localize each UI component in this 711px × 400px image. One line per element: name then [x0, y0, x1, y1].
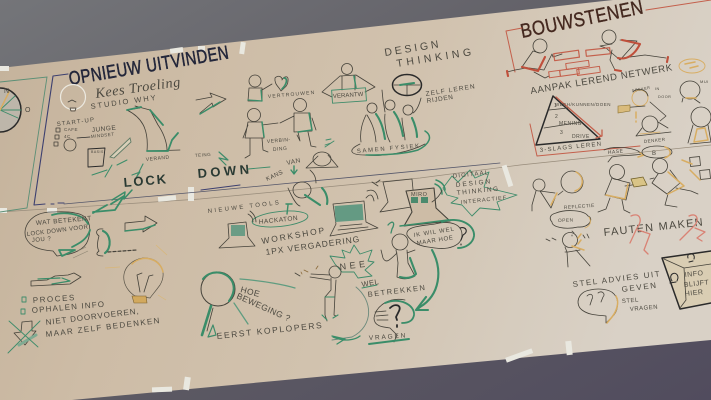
people: right column	[679, 59, 711, 144]
panel: previous section frame	[0, 77, 47, 212]
label: verbinding	[267, 137, 291, 153]
start-up checklist	[54, 127, 78, 151]
connector	[248, 167, 270, 169]
label: kans: KANS	[265, 170, 284, 183]
checklist: proces: OPHALEN INFO	[31, 300, 105, 315]
text: vragen: VRAGEN	[369, 332, 406, 342]
person: eager fist	[301, 266, 318, 274]
label: start-up: START-UP	[57, 117, 95, 128]
text: question	[27, 215, 92, 244]
label: compass N: N	[4, 88, 10, 95]
panel: nieuwe tools	[201, 170, 517, 344]
pyramid: 3-slagsleren: 1	[554, 103, 557, 109]
text: fouten maken: FAUTEN MAKEN	[603, 217, 704, 239]
text: wel betrekken	[361, 277, 426, 299]
icon: light bulb	[60, 84, 86, 111]
heading: design thinking	[384, 39, 473, 70]
people group: samen fysiek: SAMEN FYSIEK	[357, 144, 420, 155]
pyramid: 3-slagsleren: MENING	[559, 121, 582, 127]
label: verandering: VERAND	[146, 155, 170, 163]
icon: back laptop	[372, 179, 424, 212]
text: niet doorvoeren: NIET DOORVOEREN,	[45, 307, 140, 327]
icon: wheel diagram	[0, 88, 21, 132]
arrow: down green	[291, 166, 297, 174]
person: builder left	[507, 39, 562, 78]
label: zelf leren rijden	[425, 83, 476, 105]
person: listening	[546, 232, 590, 267]
label: zelf leren rijden: RIJDEN	[426, 94, 454, 105]
icon: book: BASIS	[91, 150, 104, 154]
text: workshop: 1PX VERGADERING	[265, 234, 360, 257]
icon: miro laptop: MIRO	[411, 192, 428, 198]
heading: design thinking: DESIGN	[384, 39, 440, 59]
arrow: transition	[196, 93, 226, 114]
icon: road turn arrow	[127, 106, 180, 151]
bubbles: vraag: HASE	[608, 148, 624, 156]
text: wel betrekken: WEL	[361, 277, 380, 289]
red bracket and label	[530, 124, 640, 156]
bottom frame line	[64, 163, 500, 204]
checklist: proces: PROCES	[33, 293, 75, 305]
person: head below	[288, 170, 327, 206]
bubble: ik wil wel maar hoe: MAAR HOE	[416, 235, 454, 247]
person: docker: DENKER	[644, 137, 666, 144]
label: reflectie: REFLECTIE	[564, 203, 595, 211]
people: leren: SOEKER	[631, 86, 651, 93]
text: hoe beweging: HOE	[239, 284, 261, 299]
box: info blijft hier	[662, 251, 711, 309]
label: aanpak lerend netwerk: AANPAK LEREND NETWERK	[530, 62, 674, 97]
text: hoe beweging: BEWEGING ?	[235, 291, 292, 323]
small lightning arrow	[132, 164, 143, 178]
text: question: LOCK DOWN VOOR	[27, 224, 89, 238]
icon: crossed out arrow	[8, 321, 40, 353]
speech bubble	[25, 212, 90, 258]
panel: lock down question	[8, 196, 167, 353]
bubble: open	[550, 211, 591, 236]
burst: nee	[330, 245, 374, 278]
label: tering: TEING	[195, 152, 211, 158]
icon: steering wheel	[392, 74, 422, 96]
icon: pointing hand	[286, 204, 292, 214]
title: OPNIEUW UITVINDEN	[67, 42, 231, 90]
bricks	[549, 50, 600, 78]
icon: book	[88, 148, 105, 167]
text: stel vragen: STEL	[622, 298, 639, 305]
paper tape strips	[0, 42, 573, 392]
small green zig	[219, 152, 228, 165]
text: question: WAT BETEKENT	[36, 215, 92, 227]
text: wel betrekken: BETREKKEN	[367, 283, 426, 299]
person: docker	[636, 116, 671, 144]
burst: nee: NEE	[339, 259, 366, 272]
label: vertrouwen: VERTROUWEN	[268, 90, 315, 100]
icon: miro laptop	[400, 180, 450, 226]
icon: yellow light bulb	[105, 245, 167, 303]
label: junge mindset: MINDSET	[91, 132, 115, 139]
icon: head with question mark	[374, 299, 414, 342]
start-up checklist: 4C	[64, 134, 71, 139]
box: info blijft hier: INFO	[684, 270, 704, 279]
box: info blijft hier: HIER	[684, 289, 704, 298]
text: stel advies: GEVEN	[621, 281, 657, 294]
text: hoe beweging	[234, 279, 295, 324]
icon: telephone	[97, 229, 137, 256]
pyramid: 3-slagsleren: DRIVE	[572, 134, 590, 140]
panel: reflectie and fouten maken	[532, 156, 711, 323]
heading: down: DOWN	[197, 162, 250, 181]
label: verbinding: DING	[273, 146, 288, 153]
frame	[34, 74, 68, 205]
icon: small frames top right	[682, 156, 710, 180]
label: verbinding: VERBIN-	[267, 137, 291, 145]
bubbles: vraag	[604, 146, 672, 162]
label: junge mindset: JUNGE	[91, 124, 117, 134]
arrow: green to koplopers	[332, 336, 360, 344]
text: stel vragen: VRAGEN	[630, 305, 658, 313]
people: leren	[618, 86, 671, 122]
label: nieuwe tools: NIEUWE TOOLS	[208, 200, 280, 215]
arrows: chevrons process	[31, 273, 81, 286]
bubbles: vraag: B	[652, 151, 657, 157]
person: reflection	[532, 171, 583, 211]
person: pointing no	[295, 266, 341, 321]
label: hackaton: HACKATON	[258, 215, 299, 226]
arrow: top bent	[93, 196, 124, 213]
burst: digitaal design thinking: DIGITAAL	[453, 170, 489, 180]
people: verbinding handshake	[243, 98, 316, 158]
panel: opnieuw uitvinden	[34, 39, 500, 205]
arrow: large green curved	[416, 250, 438, 310]
bubble: question marks	[578, 289, 618, 323]
checklist: proces	[21, 293, 105, 315]
people: exchanging document	[598, 158, 698, 213]
bubble: open: OPEN	[558, 217, 574, 224]
person: worried under triangle	[306, 139, 338, 168]
text: stel vragen	[622, 298, 658, 313]
arrow: lock down bolt	[112, 190, 132, 200]
people group: samen fysiek	[352, 90, 429, 155]
pyramid: 3-slagsleren: 3	[560, 130, 563, 136]
person: verantwoordelijk with cape	[322, 64, 375, 103]
icon: pen	[92, 138, 131, 177]
text: niet doorvoeren: MAAR ZELF BEDENKEN	[45, 316, 160, 339]
label: hackaton	[251, 209, 309, 229]
person: verantwoordelijk with cape: VERANTW	[333, 92, 364, 100]
panel: bouwstenen	[506, 0, 711, 162]
panel: van kans	[248, 139, 338, 206]
paper seam between rows	[0, 145, 711, 212]
text: workshop	[261, 225, 360, 257]
burst: digitaal design thinking: THINKING	[456, 186, 499, 197]
arrow: right	[125, 216, 157, 232]
pyramid: 3-slagsleren: 2	[555, 114, 558, 120]
text: eerst koplopers: EERST KOPLOPERS	[216, 320, 323, 341]
label: zelf leren rijden: ZELF LEREN	[425, 83, 476, 98]
people: vertrouwen	[248, 75, 288, 101]
label: compass O: O	[25, 107, 31, 114]
heading: design thinking: THINKING	[396, 46, 473, 70]
start-up checklist: CAFE	[64, 127, 78, 132]
text: workshop: WORKSHOP	[261, 225, 325, 246]
people: leren: IN	[655, 87, 660, 91]
speaker name: Kees Troeling	[93, 75, 182, 102]
icon: red squiggles	[630, 215, 705, 254]
people: leren: DOOR	[658, 95, 671, 99]
label: junge mindset	[77, 124, 117, 139]
frame	[506, 0, 711, 72]
speaker company: STUDIO WHY	[90, 93, 157, 111]
bubble: ik wil wel maar hoe: IK WIL WEL	[413, 227, 455, 239]
icon: laptop with video call	[330, 190, 378, 236]
icon: magnifying glass	[201, 272, 235, 337]
pyramid: 3-slagsleren: WEEH/KUNNEN/DOEN	[555, 102, 611, 107]
burst: digitaal design thinking: DESIGN	[455, 178, 491, 189]
burst: digitaal design thinking	[432, 170, 517, 216]
underline lock down	[201, 185, 240, 190]
text: stel advies: STEL ADVIES UIT	[572, 269, 661, 289]
text: question: JOU ?	[32, 236, 52, 244]
box: info blijft hier: BLIJFT	[683, 279, 710, 289]
person: doubtful	[381, 234, 416, 279]
pyramid: 3-slagsleren	[536, 96, 611, 145]
arc: wel betrekken	[332, 287, 369, 340]
person: builder right	[586, 30, 668, 71]
icon: laptop small	[219, 211, 256, 248]
people: right column: MUI	[700, 79, 709, 84]
bubble: ik wil wel maar hoe	[388, 220, 474, 248]
heading: lock: LOCK	[123, 171, 167, 190]
red bracket and label: 3-SLAGS LEREN	[540, 142, 602, 154]
label: van: VAN	[286, 157, 301, 167]
burst: digitaal design thinking: INTERACTIEF	[461, 195, 507, 206]
